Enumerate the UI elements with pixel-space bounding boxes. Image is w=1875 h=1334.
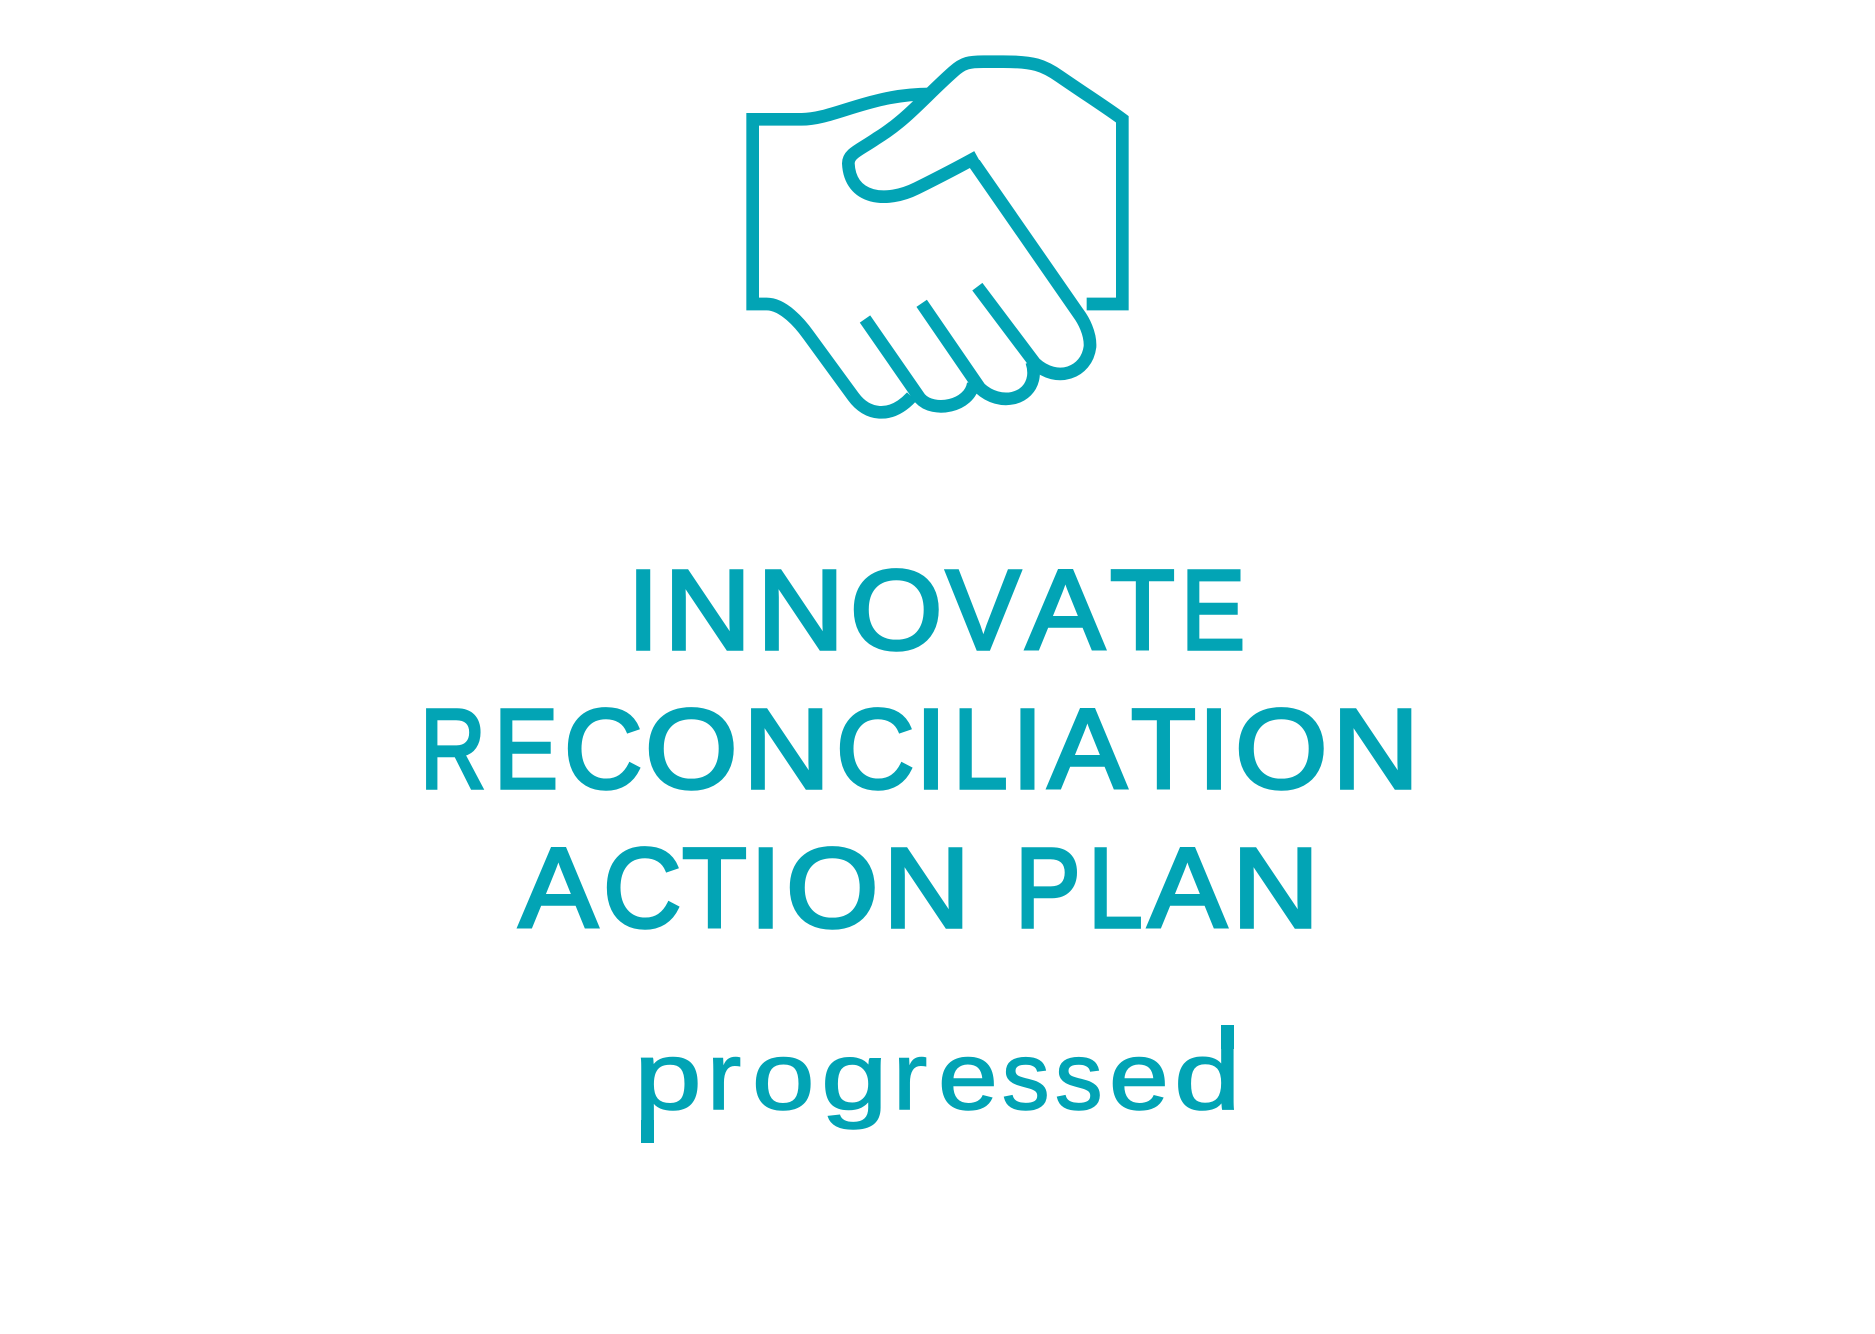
title line 1: A <box>1026 547 1105 673</box>
title line 2: R <box>420 686 486 812</box>
title line 1: I <box>628 547 659 673</box>
title line 2: I <box>1012 686 1043 812</box>
title line 2: I <box>915 686 947 812</box>
title line 1: N <box>664 547 751 673</box>
title line 3: L <box>1088 825 1143 951</box>
icon: handshake <box>746 55 1129 419</box>
title line 2: N <box>1332 686 1420 812</box>
right hand with thumb and cuff <box>848 62 1122 304</box>
title line 3: A <box>1148 825 1226 951</box>
status label: progressed: p <box>634 1023 702 1130</box>
title line 3: O <box>786 825 878 951</box>
title line 1: N <box>757 547 844 673</box>
title line 2: I <box>1198 686 1230 812</box>
status label: progressed: s <box>1055 1023 1102 1130</box>
middle finger <box>922 303 1034 399</box>
status label: progressed <box>634 1023 1241 1143</box>
title line 3: N <box>883 825 970 951</box>
title line 2: C <box>564 686 642 812</box>
title line 1: E <box>1181 547 1245 673</box>
status label: progressed: s <box>1002 1023 1049 1130</box>
title line 3: P <box>1015 825 1080 951</box>
status label: progressed: d <box>1174 1023 1241 1130</box>
title line 1: T <box>1110 547 1175 673</box>
title line 2: N <box>743 686 831 812</box>
title line 2: O <box>645 686 738 812</box>
status label: progressed: o <box>752 1023 815 1130</box>
status label: progressed: r <box>893 1023 927 1130</box>
title line 2: O <box>1235 686 1327 812</box>
status label: progressed: e <box>938 1023 998 1130</box>
status label: progressed: r <box>707 1023 741 1130</box>
title line 1: V <box>946 547 1021 673</box>
title line 2: L <box>953 686 1008 812</box>
title line 3 <box>516 825 1319 951</box>
title line 2: E <box>494 686 558 812</box>
title line 3: N <box>1232 825 1319 951</box>
left arm and outer little finger <box>753 94 930 412</box>
title line 2: T <box>1131 686 1196 812</box>
title line 2: A <box>1048 686 1126 812</box>
title line 3: C <box>603 825 682 951</box>
status label: progressed: e <box>1109 1023 1169 1130</box>
title line 2: C <box>836 686 915 812</box>
title line 3: I <box>750 825 781 951</box>
title line 2 <box>420 686 1420 812</box>
title line 3: T <box>682 825 747 951</box>
title line 1: O <box>850 547 942 673</box>
index finger outline <box>974 163 1090 374</box>
ring finger <box>865 319 973 406</box>
status label: progressed: g <box>821 1023 888 1130</box>
title line 3: A <box>519 825 597 951</box>
title line 1 <box>628 547 1245 673</box>
